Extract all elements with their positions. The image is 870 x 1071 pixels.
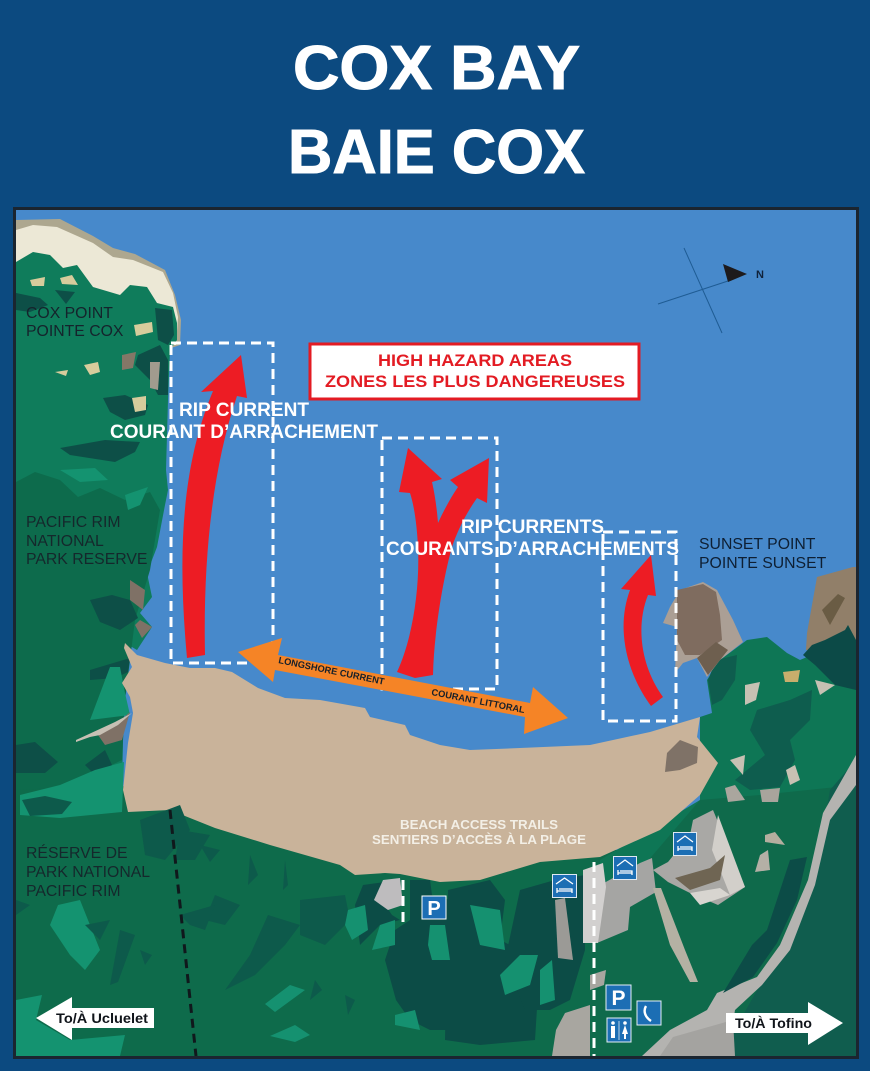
icon: lodging 1: [552, 874, 576, 898]
icon: washrooms: [607, 1018, 631, 1042]
beach trail 1: [402, 880, 404, 923]
high hazard area box 3: [603, 532, 676, 721]
icon: parking large: [606, 985, 631, 1010]
label: rip current: [110, 400, 378, 443]
land: south forest: [16, 472, 160, 800]
icon: telephone: [637, 1001, 661, 1025]
longshore current arrow: COURANT LITTORAL: [431, 687, 526, 715]
label: Sunset Point: [699, 536, 827, 572]
park boundary dashed line: [170, 810, 196, 1056]
arrow: to Tofino: [726, 1002, 843, 1045]
rip current arrow 2 (forked): [397, 448, 489, 678]
label: Cox Point: COX POINT: [26, 305, 113, 322]
hazard callout: ZONES LES PLUS DANGEREUSES: [325, 373, 625, 391]
east field: [783, 670, 800, 682]
dark forest strip along highway: [723, 857, 807, 993]
arrow: to Tofino: To/À Tofino: [735, 1015, 812, 1031]
label: Pacific Rim National Park Reserve: NATIONAL: [26, 533, 104, 550]
label: Cox Point: [26, 305, 124, 340]
east clearings: [730, 680, 835, 785]
label: Pacific Rim National Park Reserve: [26, 514, 147, 568]
compass: N: [756, 269, 764, 281]
sunset point rock: [663, 582, 743, 677]
label: rip currents: RIP CURRENTS: [461, 517, 604, 538]
water: [15, 209, 857, 1057]
rocks along west shore: [76, 352, 160, 745]
dark forest patches: west: [16, 290, 174, 775]
light green patches: west: [16, 468, 148, 1056]
high hazard area box 1: [171, 343, 273, 663]
land: east forest: [600, 637, 856, 1056]
map frame: [14, 208, 858, 1058]
label: beach access trails: SENTIERS D’ACCÈS À LA PLAGE: [372, 832, 586, 847]
rip current arrow 3: [621, 555, 663, 706]
label: rip currents: COURANTS D’ARRACHEMENTS: [386, 539, 679, 560]
label: beach access trails: BEACH ACCESS TRAILS: [400, 817, 558, 832]
label: Réserve de Parc National Pacific Rim: [26, 843, 150, 900]
label: Réserve de Parc National Pacific Rim: PACIFIC RIM: [26, 883, 120, 900]
longshore current arrow: LONGSHORE CURRENT: [278, 655, 386, 687]
icon: parking: [422, 896, 446, 920]
hazard callout: [310, 344, 639, 399]
rip current arrow 1: [182, 355, 247, 658]
south dim forest patches: [16, 796, 355, 1015]
label: beach access trails: [372, 817, 586, 847]
grey roads and clearings: [374, 755, 856, 1056]
sand beach: [122, 643, 718, 882]
title: COX BAY: [293, 34, 580, 103]
land: west forest: [16, 252, 400, 1056]
west cape cliffs: [16, 219, 181, 350]
land clearings: west: [30, 275, 153, 412]
label: Pacific Rim National Park Reserve: PACIFIC RIM: [26, 514, 120, 531]
label: rip current: RIP CURRENT: [179, 400, 309, 421]
label: Sunset Point: POINTE SUNSET: [699, 555, 827, 572]
label: Pacific Rim National Park Reserve: PARK RESERVE: [26, 551, 147, 568]
icon: parking: P: [427, 898, 441, 920]
right of highway darker forest: [720, 760, 856, 1056]
icon: lodging 3: [674, 832, 696, 856]
map panel: [14, 208, 858, 1058]
title: [288, 34, 585, 187]
longshore current arrow: [238, 638, 568, 734]
east forest lower tone: [600, 785, 856, 1056]
label: Réserve de Parc National Pacific Rim: RÉSERVE DE: [26, 843, 128, 862]
east dark forest: [708, 655, 812, 790]
label: rip currents: [386, 517, 679, 560]
south dark forest patches: [355, 875, 585, 1045]
label: Réserve de Parc National Pacific Rim: PARK NATIONAL: [26, 864, 150, 881]
label: Cox Point: POINTE COX: [26, 323, 124, 340]
arrow: to Ucluelet: To/À Ucluelet: [56, 1010, 148, 1026]
arrow: to Ucluelet: [36, 997, 154, 1040]
title: BAIE COX: [288, 118, 585, 187]
icon: parking large: P: [611, 987, 626, 1010]
beach trail 2: [592, 862, 596, 1056]
compass: [658, 248, 764, 333]
label: Sunset Point: SUNSET POINT: [699, 536, 816, 553]
small rock on beach: [665, 740, 698, 772]
south light green patches: [265, 905, 555, 1042]
east headland: [803, 567, 856, 690]
label: rip current: COURANT D’ARRACHEMENT: [110, 422, 378, 443]
high hazard area box 2: [382, 438, 497, 689]
icon: lodging 2: [614, 856, 636, 880]
hazard callout: HIGH HAZARD AREAS: [378, 352, 572, 370]
